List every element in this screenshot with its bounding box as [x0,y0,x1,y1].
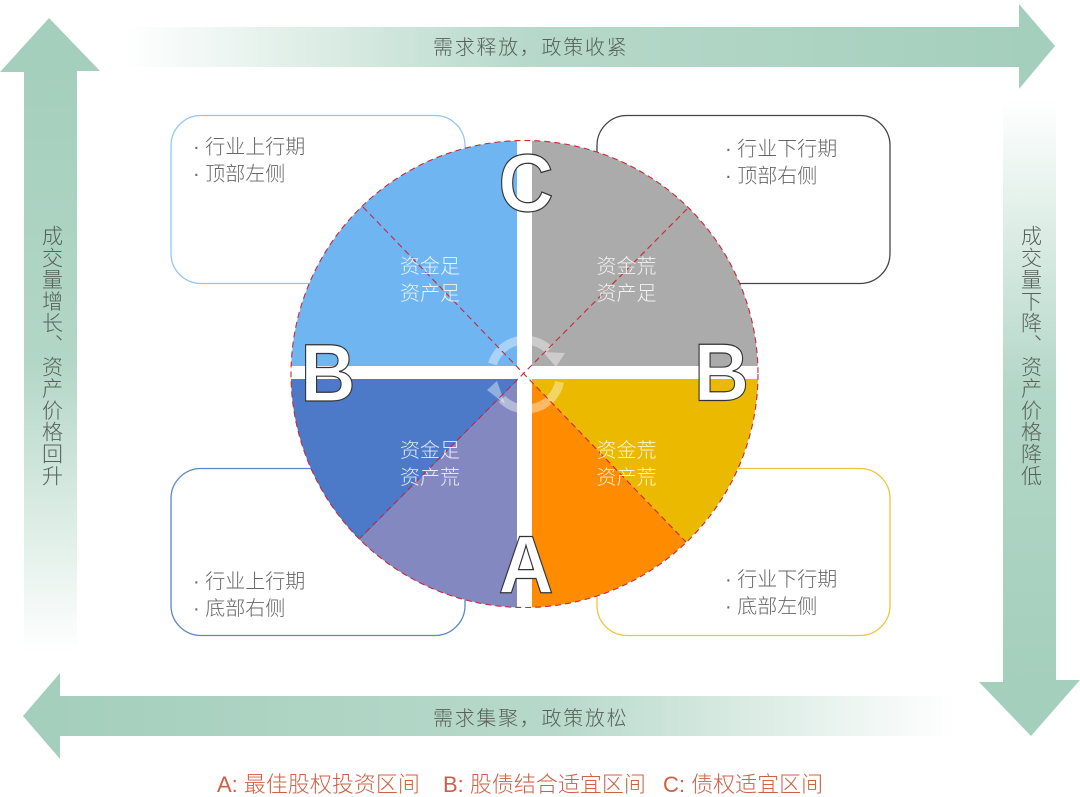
quadrant label: lower left: 资金足 [400,439,460,462]
circle chart [289,136,760,611]
bottom band label: 需求集聚，政策放松 [433,707,628,730]
card: top right: · 行业下行期 [725,138,837,160]
card: bottom right: · 行业下行期 [725,568,837,591]
top band label: 需求释放，政策收紧 [433,36,628,59]
arrow: top band pointing right [125,4,1055,89]
card: bottom left [171,468,465,636]
sector: upper right [524,140,758,374]
white cross [289,139,760,609]
sector: lower left outer [291,374,524,540]
left band label: 成交量增长、资产价格回升 [40,225,63,487]
quadrant label: upper left: 资金足 [400,255,460,278]
quadrant label: upper right [596,255,656,305]
legend: B: 股债结合适宜区间 [443,772,646,797]
letter A: A [498,518,554,611]
quadrant label: lower right [596,439,656,489]
letter B right: B [694,326,749,418]
arrow: bottom band pointing left [23,673,955,759]
sector: lower right inner [524,374,686,608]
card: top left: · 顶部左侧 [193,162,285,186]
letter B left: B [300,326,356,419]
legend: A: 最佳股权投资区间 [217,772,420,797]
card: bottom right: · 底部左侧 [725,595,817,618]
card: bottom left: · 底部右侧 [193,597,285,620]
quadrant label: lower left: 资产荒 [400,466,460,489]
sector: lower right outer [524,374,758,542]
card: bottom left: · 行业上行期 [193,570,305,593]
sector: lower left inner [360,374,524,608]
quadrant label: upper left: 资产足 [400,282,460,305]
legend [217,772,823,797]
quadrant label: lower right: 资产荒 [596,466,656,489]
quadrant label: lower right: 资金荒 [596,439,656,462]
quadrant label: upper right: 资金荒 [596,255,656,278]
arrow: left band pointing up [0,18,100,652]
legend: C: 债权适宜区间 [663,772,823,797]
sector: upper left [291,140,524,374]
card: top right [597,116,890,284]
card: top left [171,116,465,284]
right band label: 成交量下降、资产价格降低 [1018,225,1042,487]
letter C: C [498,136,554,229]
card: bottom right [597,468,890,636]
dashed outline and diagonals [291,140,758,608]
quadrant label: upper right: 资产足 [596,282,656,305]
arrow: right band pointing down [979,100,1080,736]
quadrant label: lower left [400,439,460,489]
quadrant label: upper left [400,255,460,305]
card: top left: · 行业上行期 [193,136,305,158]
icon: cycle arrows [487,340,565,409]
card: top right: · 顶部右侧 [725,164,817,188]
